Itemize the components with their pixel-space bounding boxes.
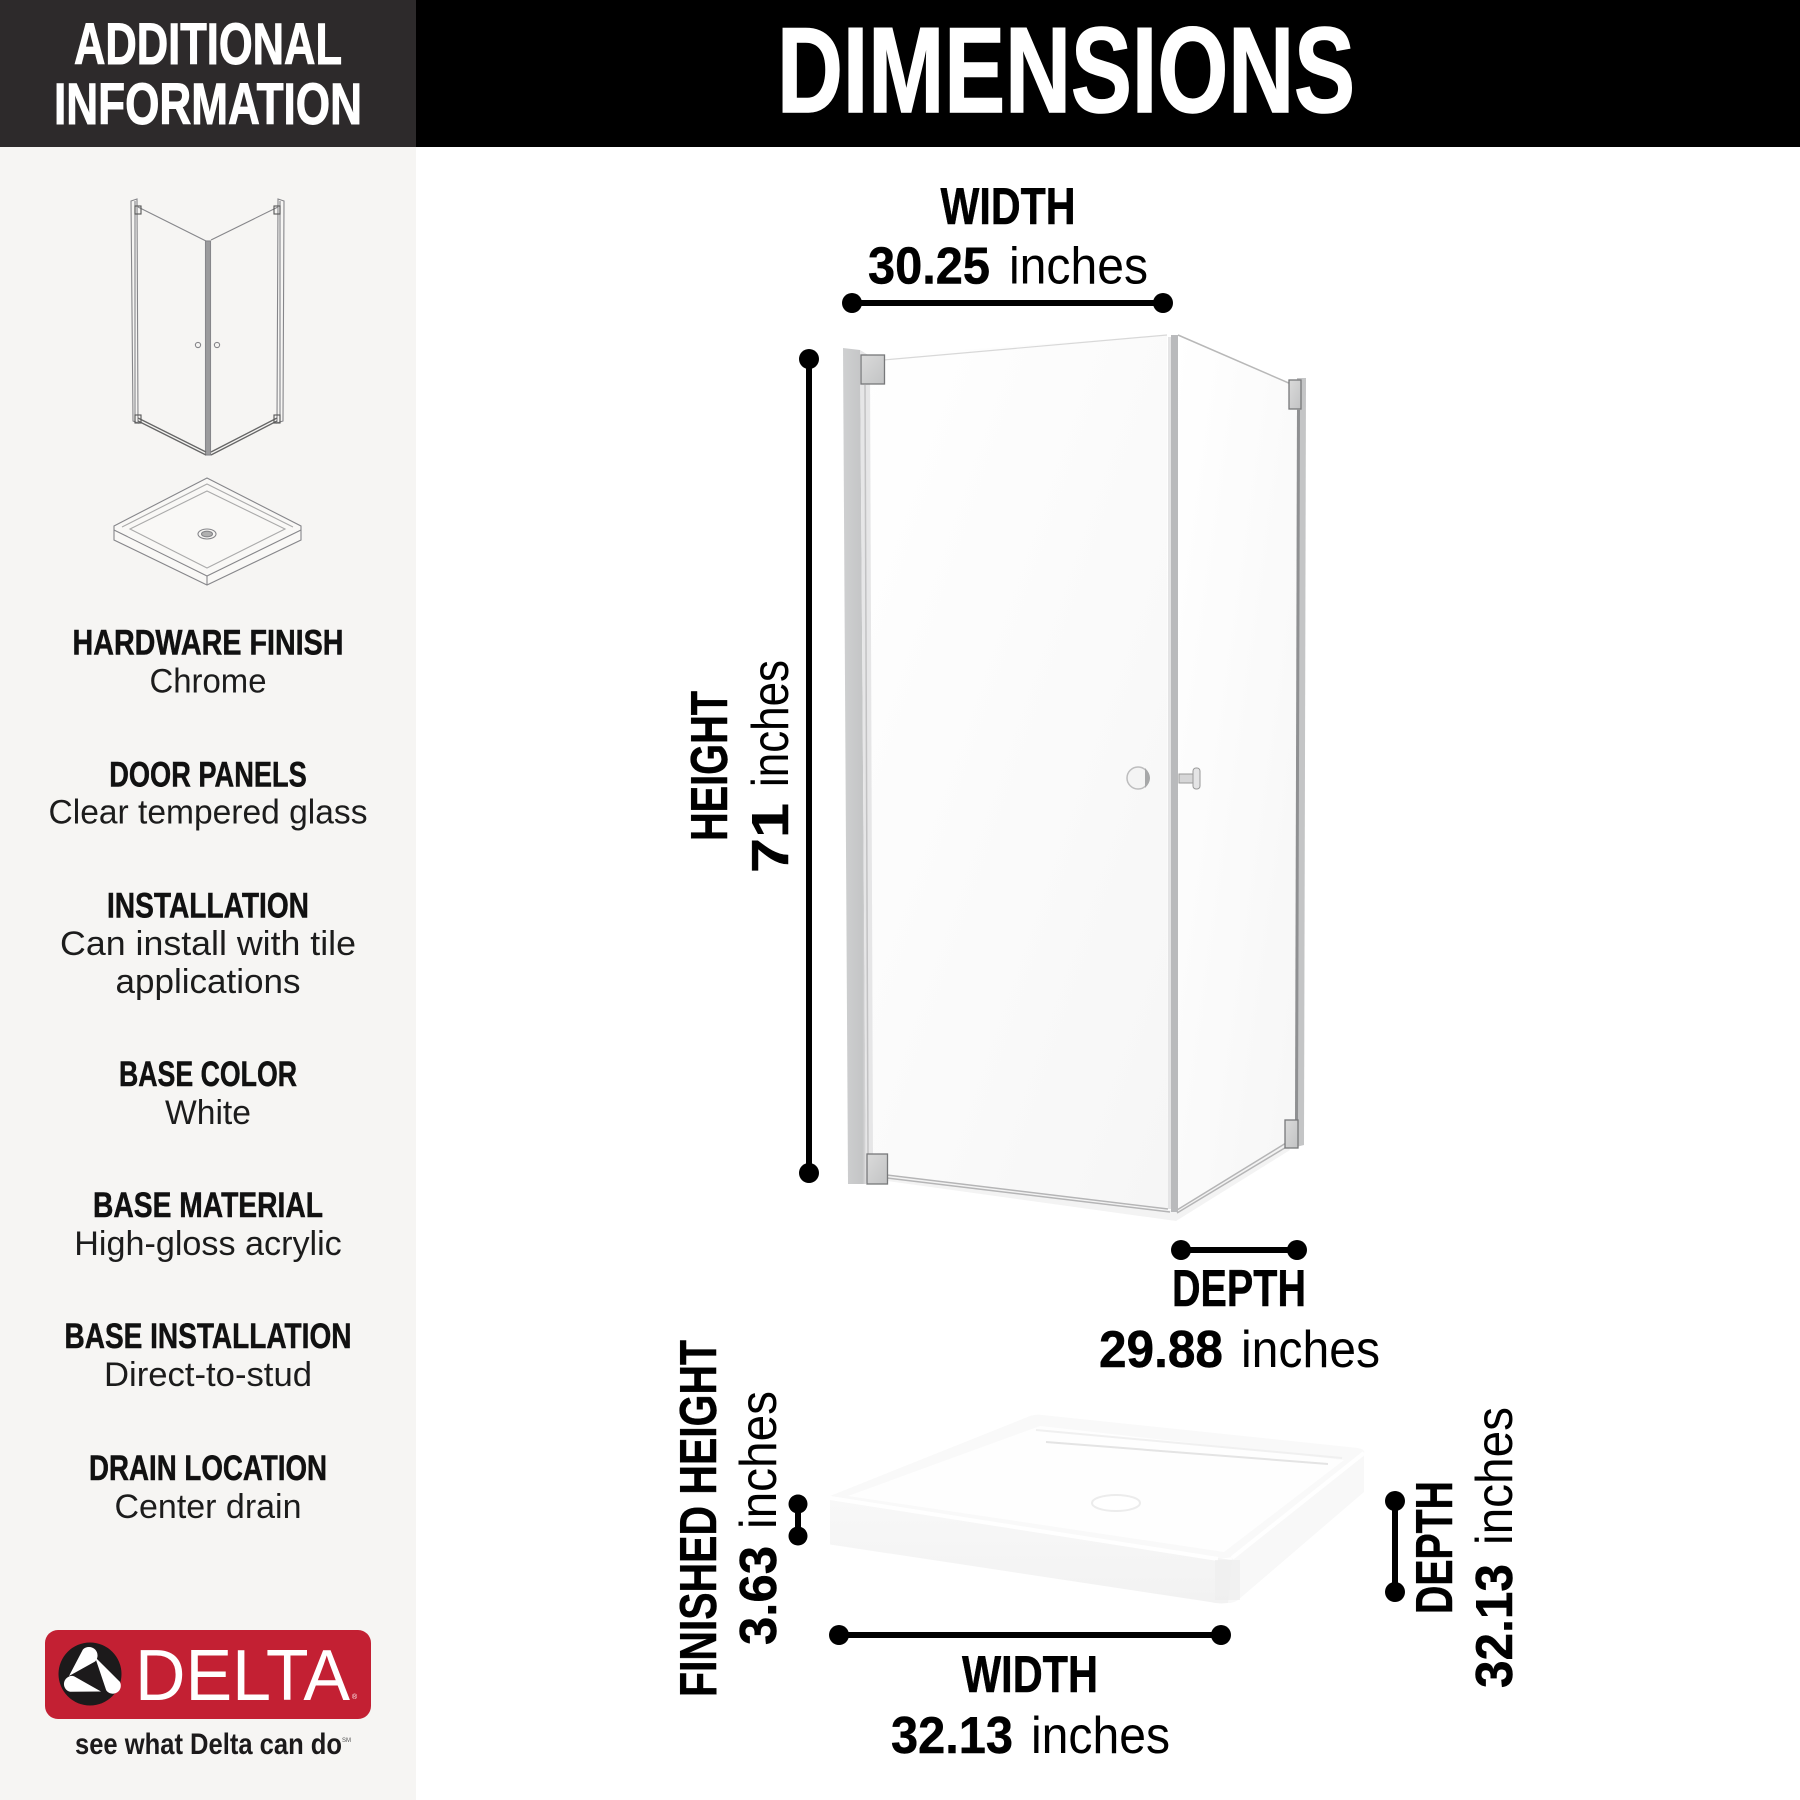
delta logo: see what Delta can do <box>75 1728 342 1761</box>
spec: installation: Can install with tile <box>60 925 356 963</box>
spec: hardware finish <box>72 624 344 700</box>
base lip under the enclosure <box>880 1143 1290 1221</box>
header: additional information: ADDITIONAL <box>74 12 342 77</box>
spec: hardware finish: Chrome <box>150 662 266 700</box>
hinges <box>861 355 884 384</box>
spec: installation: applications <box>116 963 300 1001</box>
dimension: base depth: DEPTH <box>1406 1481 1464 1614</box>
spec: door panels: DOOR PANELS <box>109 756 307 794</box>
spec: base installation: BASE INSTALLATION <box>64 1317 352 1356</box>
spec: installation: INSTALLATION <box>107 886 309 926</box>
sidebar panel <box>0 147 416 1800</box>
spec: base material: High-gloss acrylic <box>74 1225 342 1263</box>
dimension: door depth <box>1099 1240 1380 1379</box>
spec: drain location: DRAIN LOCATION <box>89 1449 327 1488</box>
dimension: door depth: inches <box>1241 1321 1380 1379</box>
door glass <box>866 335 1168 1209</box>
spec: base installation <box>64 1317 352 1394</box>
spec: base color <box>119 1055 297 1132</box>
corner post <box>1171 335 1178 1212</box>
dimension: base width: 32.13 <box>891 1707 1013 1765</box>
delta logo: SM <box>342 1738 351 1744</box>
dimension: base width: WIDTH <box>962 1646 1098 1704</box>
dimension: door width: 30.25 <box>868 238 990 296</box>
spec: installation <box>60 886 356 1001</box>
header: additional information: INFORMATION <box>54 72 362 137</box>
dimension: door width: WIDTH <box>940 178 1076 236</box>
spec: base color: BASE COLOR <box>119 1055 297 1094</box>
dimension: base depth: 32.13 <box>1466 1564 1524 1688</box>
dimension: height: inches <box>742 660 800 787</box>
front face <box>830 1498 1232 1604</box>
side glass <box>1177 335 1298 1211</box>
spec: base installation: Direct-to-stud <box>104 1356 312 1394</box>
dimension: height: 71 <box>742 803 800 873</box>
dimension: finished height <box>670 1340 808 1697</box>
dimension: finished height: inches <box>730 1391 788 1529</box>
dimension: door depth: DEPTH <box>1172 1260 1306 1318</box>
dimension: door width <box>842 178 1173 313</box>
door knobs <box>1127 767 1149 789</box>
icon: shower door line drawing <box>131 199 284 455</box>
spec: base material <box>74 1186 342 1263</box>
icon: shower base line drawing <box>114 478 301 585</box>
spec: drain location <box>89 1449 327 1526</box>
dimension: finished height: FINISHED HEIGHT <box>670 1340 728 1697</box>
left wall frame <box>843 348 866 1184</box>
dimension: height <box>681 349 819 1183</box>
delta logo: ® <box>352 1693 358 1701</box>
dimension: base depth: inches <box>1466 1407 1524 1545</box>
shower base photo <box>830 1415 1364 1604</box>
spec: base color: White <box>165 1094 251 1132</box>
delta logo <box>45 1630 371 1761</box>
spec: hardware finish: HARDWARE FINISH <box>72 624 344 662</box>
spec: door panels: Clear tempered glass <box>48 794 368 832</box>
spec: drain location: Center drain <box>114 1488 302 1526</box>
dimension: base depth <box>1385 1407 1524 1688</box>
pan floor <box>848 1426 1344 1552</box>
dimension: door depth: 29.88 <box>1099 1321 1223 1379</box>
dimension: finished height: 3.63 <box>730 1546 788 1645</box>
dimension: base width: inches <box>1031 1707 1170 1765</box>
top rim <box>830 1415 1364 1558</box>
right wall frame <box>1296 378 1306 1147</box>
header: additional information <box>0 0 416 147</box>
right face <box>1228 1455 1364 1603</box>
header: dimensions: DIMENSIONS <box>777 2 1355 138</box>
spec: door panels <box>48 756 368 832</box>
dimension: door width: inches <box>1009 238 1148 296</box>
spec: base material: BASE MATERIAL <box>93 1186 323 1225</box>
header: dimensions <box>416 0 1800 147</box>
dimension: height: HEIGHT <box>681 691 739 841</box>
dimension: base width <box>829 1625 1231 1765</box>
delta logo: DELTA <box>135 1636 350 1716</box>
shower enclosure photo <box>843 335 1306 1221</box>
